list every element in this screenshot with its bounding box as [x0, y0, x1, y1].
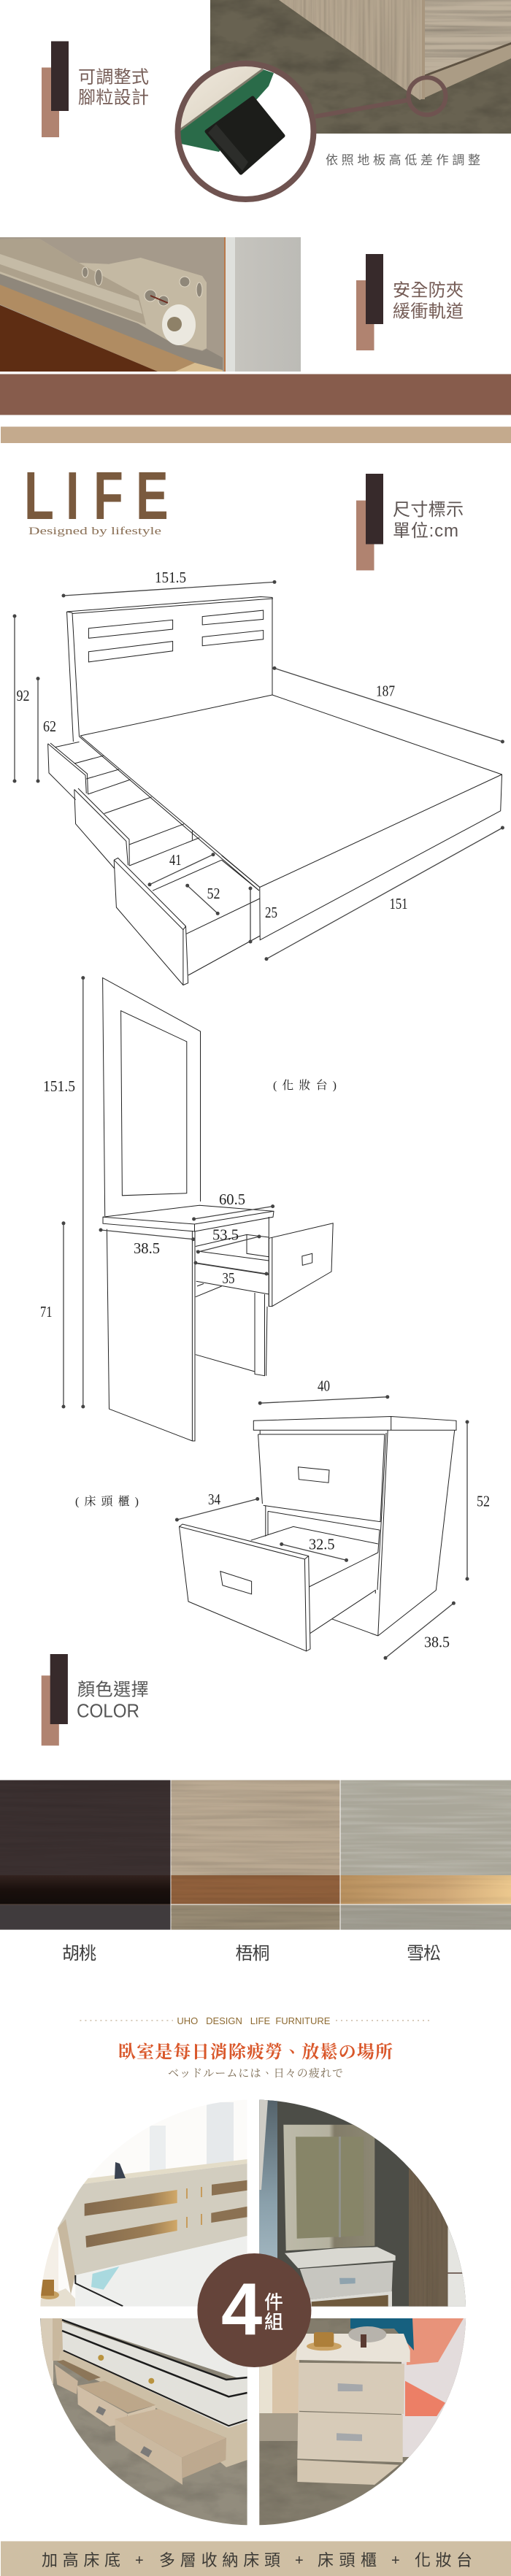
badge: 4-piece set — [197, 2253, 311, 2367]
dimension: drawer 53.5: 53.5 — [212, 1226, 239, 1244]
swatch: oak: 梧桐 — [235, 1944, 270, 1964]
dimension: drawer 34: 34 — [208, 1491, 220, 1508]
subtitle: ベッドルームには、日々の疲れで — [168, 2067, 343, 2080]
footer text: + — [135, 2553, 144, 2569]
logo letters: E — [136, 458, 169, 534]
dimension: height 52: 52 — [477, 1492, 490, 1510]
dimension: width 151: 151 — [390, 895, 407, 912]
label: dressing table: (化妝台) — [273, 1079, 337, 1092]
heading: size and unit: 單位:cm — [393, 521, 458, 541]
heading: color — [77, 1680, 149, 1722]
dimension: base 25: 25 — [265, 904, 277, 921]
dimension: side 38.5: 38.5 — [134, 1239, 160, 1257]
dimension: height 92: 92 — [16, 687, 29, 704]
photo: cabinet corner on floor — [210, 0, 511, 134]
heading: size and unit — [393, 500, 464, 541]
heading: soft-close rail — [393, 280, 464, 321]
bed drawers — [48, 742, 260, 985]
badge label: 件 — [264, 2291, 283, 2313]
swatch: walnut — [0, 1780, 171, 1964]
dimension: drawer 41: 41 — [169, 851, 181, 869]
dimension: depth 60.5 — [192, 1191, 274, 1220]
dimension: height 62 — [36, 677, 56, 783]
dimension: width 151 — [264, 826, 504, 961]
footer text: + — [295, 2553, 304, 2569]
tagline: Designed by lifestyle — [28, 526, 161, 537]
heading: color: 顏色選擇 — [77, 1680, 149, 1699]
heading: size and unit: 尺寸標示 — [393, 500, 464, 520]
footer text — [42, 2551, 472, 2569]
photo: bed headboard — [39, 2099, 247, 2307]
line drawing: bed with drawers — [13, 569, 504, 985]
panel: color swatches — [0, 1780, 511, 1964]
pulled-out drawer front — [269, 1223, 333, 1307]
dimension: drawer 35 — [193, 1261, 269, 1287]
heading block: dimensions — [356, 474, 464, 570]
swatch: snow pine — [340, 1780, 511, 1964]
dimension: length 187: 187 — [376, 683, 395, 700]
cabinet body — [253, 1416, 456, 1636]
footer text: 多層收納床頭 — [159, 2551, 280, 2569]
dimension: headboard width 151.5 — [61, 569, 276, 597]
swatch: walnut: 胡桃 — [62, 1944, 96, 1964]
icon bars: color — [42, 1654, 68, 1745]
panel: soft-close rail — [0, 237, 464, 372]
heading: adjustable feet — [78, 67, 149, 108]
logo letters: L — [24, 458, 54, 534]
logo letters: I — [66, 458, 80, 534]
dimension: total height 151.5: 151.5 — [43, 1077, 75, 1095]
dimension: drawer 52: 52 — [207, 885, 220, 902]
heading: soft-close rail: 安全防夾 — [393, 280, 464, 301]
badge label — [264, 2291, 283, 2333]
photo: bed base with drawers — [40, 2318, 247, 2526]
dimension: depth 60.5: 60.5 — [219, 1191, 245, 1208]
dimension: table height 71: 71 — [40, 1303, 53, 1320]
photo: nightstand with poster — [259, 2318, 467, 2526]
dimension: drawer 53.5 — [196, 1226, 261, 1254]
footer text: 床頭櫃 — [318, 2551, 377, 2569]
dimension: height 92 — [13, 615, 29, 783]
tan divider band — [1, 426, 511, 443]
footer text: + — [391, 2553, 400, 2569]
swatch: snow pine: 雪松 — [407, 1944, 441, 1964]
footer text: 化妝台 — [415, 2551, 472, 2569]
dimension: drawer 41 — [147, 851, 215, 886]
icon bars: feet heading — [42, 41, 69, 137]
footer text: 加高床底 — [42, 2551, 120, 2569]
dimension: base 25 — [248, 886, 277, 943]
icon bars: rail heading — [356, 254, 383, 350]
icon bars: dimensions — [356, 474, 383, 570]
callout: zoom on foot — [175, 62, 445, 199]
heading: adjustable feet: 腳粒設計 — [78, 88, 149, 108]
photo: drawer rail and roller — [0, 237, 301, 372]
dimension: table height 71 — [40, 1221, 66, 1409]
dimension: width 40 — [258, 1377, 389, 1405]
bed outline — [67, 597, 502, 940]
dimension: drawer 32.5: 32.5 — [309, 1536, 334, 1553]
title: 臥室是每日消除疲勞、放鬆の場所 — [118, 2042, 393, 2062]
dimension: depth 38.5 — [384, 1602, 456, 1660]
heading: color: COLOR — [77, 1700, 139, 1722]
panel: adjustable feet — [42, 0, 511, 199]
dimension: total height 151.5 — [43, 976, 85, 1409]
numeral 4: 4 — [221, 2269, 262, 2350]
photo: dressing table — [259, 2099, 467, 2307]
dimension: side 38.5 — [99, 1228, 195, 1257]
line drawing: nightstand — [75, 1377, 490, 1660]
line drawing: dressing table — [40, 976, 337, 1441]
footer band: set contents — [1, 2541, 511, 2576]
brown divider band — [0, 374, 511, 415]
dimension: height 62: 62 — [43, 718, 56, 735]
brand line with dots: UHO DESIGN LIFE FURNITURE — [177, 2015, 331, 2026]
dimension: length 187 — [273, 666, 504, 743]
mirror — [103, 978, 200, 1216]
dimension: depth 38.5: 38.5 — [424, 1634, 450, 1651]
badge label: 組 — [264, 2311, 283, 2333]
dimension: width 40: 40 — [318, 1377, 330, 1395]
caption: adjust by floor height: 依照地板高低差作調整 — [326, 153, 480, 167]
dimension: height 52 — [466, 1420, 490, 1581]
logo letters: F — [93, 458, 123, 534]
swatch: oak — [171, 1780, 340, 1964]
dimension: headboard width 151.5: 151.5 — [155, 569, 186, 586]
dimension: drawer 32.5 — [280, 1536, 348, 1562]
dimension: drawer 34 — [175, 1491, 259, 1521]
heading: adjustable feet: 可調整式 — [78, 67, 149, 88]
label: nightstand: (床頭櫃) — [75, 1495, 139, 1508]
photo collage: four-piece set — [39, 2099, 467, 2526]
dimension: drawer 52 — [185, 884, 220, 915]
brand: LIFE — [24, 458, 169, 537]
table body — [103, 1205, 274, 1441]
section header: bedroom message — [80, 2015, 430, 2080]
logo letters — [24, 458, 169, 534]
dimension: drawer 35: 35 — [222, 1269, 235, 1287]
heading: soft-close rail: 緩衝軌道 — [393, 302, 464, 321]
open lower drawer — [180, 1505, 380, 1651]
heading block: color choice — [42, 1654, 149, 1745]
